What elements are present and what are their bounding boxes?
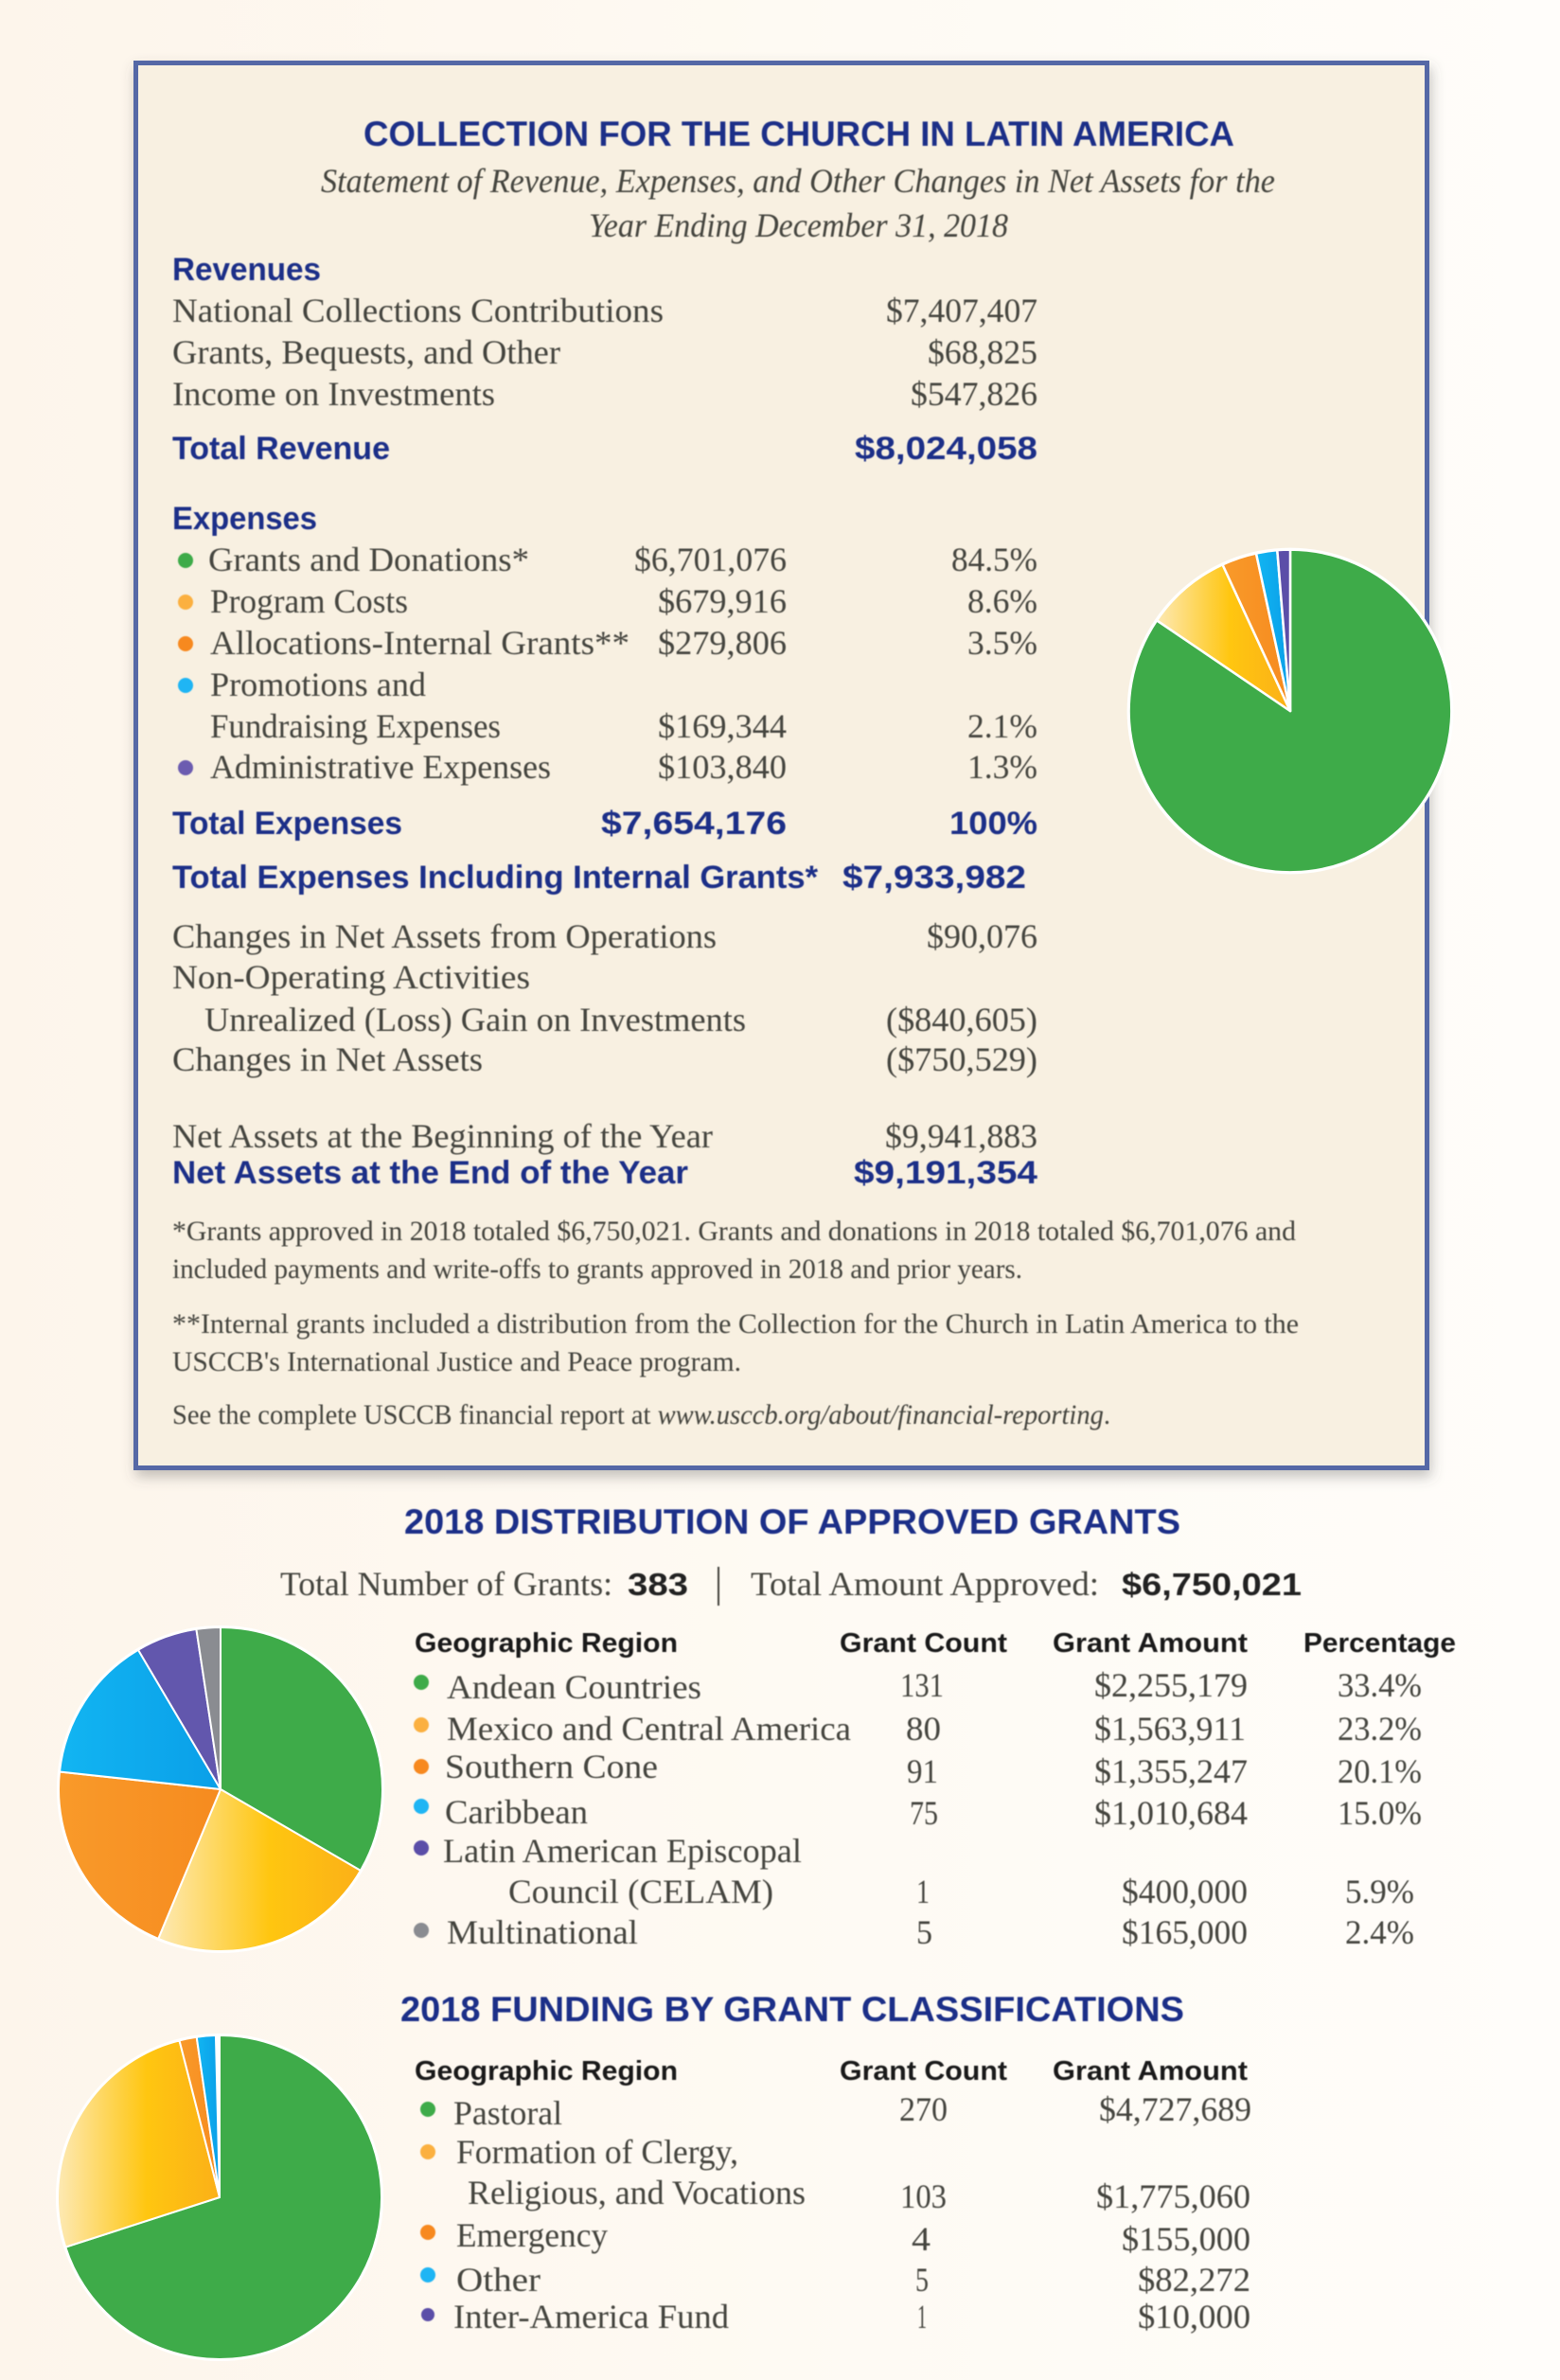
expenses section: $679,916 <box>658 582 787 620</box>
table: classifications: Grant Amount <box>1053 2056 1248 2087</box>
table: classifications: Grant Count <box>840 2056 1007 2087</box>
expenses section: Administrative Expenses <box>210 748 551 786</box>
revenues section: $7,407,407 <box>886 292 1037 329</box>
revenues section <box>172 252 1037 467</box>
table: geographic regions: 91 <box>907 1752 938 1790</box>
table: geographic regions: $1,563,911 <box>1094 1710 1246 1748</box>
table: classifications: 5 <box>915 2261 929 2299</box>
expenses section: $169,344 <box>658 707 787 745</box>
table: classifications: Inter-America Fund <box>453 2298 729 2336</box>
footnotes <box>172 1216 1299 1430</box>
table: geographic regions: 33.4% <box>1338 1666 1422 1704</box>
footnotes: *Grants approved in 2018 totaled $6,750,021. Grants and donations in 2018 totaled $6,701,076 and <box>172 1216 1296 1247</box>
table: geographic regions <box>414 1628 1456 1951</box>
revenues section: $547,826 <box>911 375 1037 413</box>
totals line: Total Number of Grants: <box>280 1565 612 1603</box>
table: classifications: 103 <box>900 2177 947 2215</box>
totals line: $6,750,021 <box>1122 1567 1302 1602</box>
expenses section: 100% <box>949 806 1037 842</box>
totals line: 383 <box>628 1567 688 1602</box>
net assets section: Net Assets at the End of the Year <box>172 1155 688 1191</box>
subtitle: Statement of Revenue, Expenses, and Other Changes in Net Assets for the <box>321 162 1275 200</box>
table: geographic regions: $2,255,179 <box>1094 1666 1248 1704</box>
table: geographic regions: Multinational <box>447 1913 638 1951</box>
table: geographic regions: 80 <box>906 1710 941 1748</box>
table: classifications: Pastoral <box>453 2094 562 2132</box>
table: geographic regions: Council (CELAM) <box>508 1873 773 1910</box>
net assets section: ($750,529) <box>886 1040 1037 1078</box>
expenses section <box>172 501 1037 896</box>
expenses section: Fundraising Expenses <box>210 707 501 745</box>
expenses section: Program Costs <box>210 582 408 620</box>
pie chart: geographic regions <box>57 1625 384 1953</box>
expenses section: Promotions and <box>210 666 426 703</box>
revenues section: Grants, Bequests, and Other <box>172 333 560 371</box>
net assets section: Changes in Net Assets from Operations <box>172 917 717 955</box>
heading: 2018 FUNDING BY GRANT CLASSIFICATIONS <box>400 1990 1184 2029</box>
revenues section: Revenues <box>172 252 321 288</box>
table: classifications: $1,775,060 <box>1096 2177 1250 2215</box>
revenues section: Income on Investments <box>172 375 495 413</box>
table: classifications: $155,000 <box>1122 2220 1250 2258</box>
table: classifications: 270 <box>899 2090 948 2128</box>
table: geographic regions: 23.2% <box>1338 1710 1422 1748</box>
footnotes: **Internal grants included a distribution from the Collection for the Church in Latin America to the <box>172 1308 1299 1340</box>
expenses section: Grants and Donations* <box>208 541 529 578</box>
table: classifications: Other <box>456 2261 541 2299</box>
expenses section: Allocations-Internal Grants** <box>210 624 629 662</box>
table: geographic regions: $165,000 <box>1122 1913 1248 1951</box>
table: classifications: 4 <box>912 2220 931 2258</box>
table: geographic regions: 131 <box>900 1666 944 1704</box>
revenues section: National Collections Contributions <box>172 292 664 329</box>
subtitle: Year Ending December 31, 2018 <box>589 206 1008 244</box>
table: geographic regions: Grant Amount <box>1053 1628 1248 1659</box>
pie chart: expenses <box>1127 548 1453 874</box>
net assets section: Changes in Net Assets <box>172 1040 483 1078</box>
totals line: Total Amount Approved: <box>751 1565 1099 1603</box>
revenues section: $68,825 <box>928 333 1037 371</box>
subtitle <box>321 162 1275 244</box>
table: geographic regions: $1,355,247 <box>1094 1752 1248 1790</box>
table: geographic regions: 2.4% <box>1345 1913 1414 1951</box>
expenses section: 8.6% <box>967 582 1037 620</box>
table: geographic regions: 1 <box>916 1873 930 1910</box>
totals line <box>280 1565 1302 1606</box>
table: geographic regions: Geographic Region <box>415 1628 678 1659</box>
table: geographic regions: Southern Cone <box>445 1748 658 1785</box>
table: classifications: $82,272 <box>1138 2261 1250 2299</box>
statement text <box>172 115 1299 1430</box>
net assets section: $9,941,883 <box>885 1117 1037 1155</box>
expenses section: Total Expenses Including Internal Grants* <box>172 860 819 896</box>
expenses section: 3.5% <box>967 624 1037 662</box>
table: geographic regions: 20.1% <box>1338 1752 1422 1790</box>
net assets section: Non-Operating Activities <box>172 958 530 996</box>
expenses section: $103,840 <box>658 748 787 786</box>
table: classifications: $4,727,689 <box>1099 2090 1251 2128</box>
table: geographic regions: Andean Countries <box>447 1668 701 1706</box>
table: classifications: Geographic Region <box>415 2056 678 2087</box>
net assets section: Unrealized (Loss) Gain on Investments <box>204 1001 746 1039</box>
expenses section: $6,701,076 <box>634 541 787 578</box>
table: classifications <box>415 2056 1251 2336</box>
table: classifications: Religious, and Vocations <box>468 2174 806 2211</box>
table: geographic regions: Latin American Episcopal <box>443 1832 802 1870</box>
table: geographic regions: Caribbean <box>445 1793 588 1831</box>
expenses section: Total Expenses <box>172 806 402 842</box>
table: classifications: Formation of Clergy, <box>456 2133 738 2171</box>
table: classifications: 1 <box>917 2298 927 2336</box>
table: geographic regions: 5.9% <box>1345 1873 1414 1910</box>
section: distribution of approved grants <box>280 1502 1456 1951</box>
footnotes: included payments and write-offs to grants approved in 2018 and prior years. <box>172 1253 1022 1285</box>
expenses section: 84.5% <box>951 541 1037 578</box>
expenses section: Expenses <box>172 501 317 537</box>
expenses section: $7,654,176 <box>601 806 787 842</box>
expenses section: $7,933,982 <box>842 860 1026 896</box>
net assets section: ($840,605) <box>886 1001 1037 1039</box>
footnotes: See the complete USCCB financial report at www.usccb.org/about/financial-reporting. <box>172 1399 1110 1430</box>
table: classifications: Emergency <box>456 2216 608 2254</box>
expenses section: 2.1% <box>967 707 1037 745</box>
net assets section: $9,191,354 <box>854 1155 1037 1191</box>
table: geographic regions: 75 <box>910 1794 938 1832</box>
heading: 2018 DISTRIBUTION OF APPROVED GRANTS <box>404 1502 1180 1541</box>
table: geographic regions: 15.0% <box>1338 1794 1422 1832</box>
expenses section: 1.3% <box>967 748 1037 786</box>
table: geographic regions: $1,010,684 <box>1094 1794 1248 1832</box>
net assets section: $90,076 <box>927 917 1037 955</box>
revenues section: Total Revenue <box>172 431 390 467</box>
panel: financial statement <box>136 62 1427 1467</box>
table: classifications: $10,000 <box>1138 2298 1250 2336</box>
title: COLLECTION FOR THE CHURCH IN LATIN AMERICA <box>363 115 1234 153</box>
table: geographic regions: Grant Count <box>840 1628 1007 1659</box>
table: geographic regions: Percentage <box>1303 1628 1456 1659</box>
revenues section: $8,024,058 <box>855 431 1037 467</box>
table: geographic regions: 5 <box>916 1913 932 1951</box>
pie chart: classifications <box>56 2034 383 2361</box>
footnotes: USCCB's International Justice and Peace program. <box>172 1346 741 1377</box>
net assets section <box>172 917 1037 1191</box>
section: funding by grant classifications <box>400 1990 1251 2336</box>
net assets section: Net Assets at the Beginning of the Year <box>172 1117 713 1155</box>
table: geographic regions: Mexico and Central America <box>447 1710 851 1748</box>
table: geographic regions: $400,000 <box>1122 1873 1248 1910</box>
expenses section: $279,806 <box>658 624 787 662</box>
